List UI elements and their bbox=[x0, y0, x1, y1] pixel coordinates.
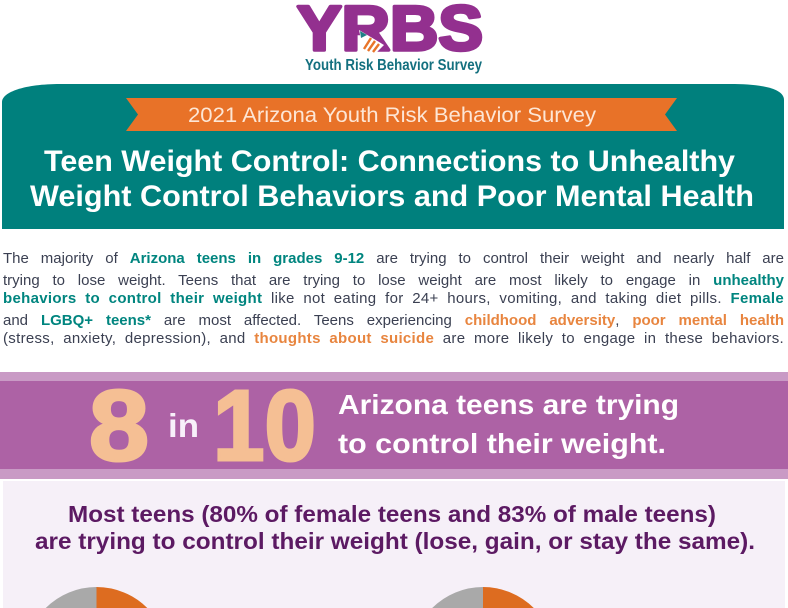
stat text: to control their weight. bbox=[338, 428, 666, 459]
title: Weight Control Behaviors and Poor Mental Health bbox=[30, 180, 754, 213]
intro text: behaviors to control their weight like not eating for 24+ hours, vomiting, and taking diet pills. Female bbox=[3, 290, 784, 307]
header banner bbox=[2, 84, 784, 229]
stat: 8 in 10: 8 bbox=[89, 370, 149, 482]
stat: 8 in 10 bbox=[89, 370, 316, 482]
panel heading: Most teens (80% of female teens and 83% of male teens) bbox=[68, 501, 716, 527]
stat: 8 in 10: in bbox=[168, 407, 199, 444]
stat text bbox=[338, 389, 679, 459]
stat: 8 in 10: 10 bbox=[213, 370, 316, 482]
intro text bbox=[3, 250, 784, 347]
intro text: The majority of Arizona teens in grades 9-12 are trying to control their weight and nearly half are bbox=[3, 250, 784, 267]
ribbon bbox=[126, 98, 677, 131]
pie chart: male teens bbox=[432, 587, 534, 608]
intro text: trying to lose weight. Teens that are trying to lose weight are most likely to engage in unhealthy bbox=[3, 272, 784, 289]
stat text: Arizona teens are trying bbox=[338, 389, 679, 420]
title bbox=[30, 145, 754, 213]
panel: weight control bbox=[3, 481, 785, 608]
panel heading: are trying to control their weight (lose, gain, or stay the same). bbox=[35, 528, 755, 554]
intro text: (stress, anxiety, depression), and thoughts about suicide are more likely to engage in these behaviors. bbox=[3, 330, 784, 347]
intro text: and LGBQ+ teens* are most affected. Teens experiencing childhood adversity, poor mental health bbox=[3, 312, 784, 329]
title: Teen Weight Control: Connections to Unhealthy bbox=[44, 145, 735, 178]
ribbon: 2021 Arizona Youth Risk Behavior Survey bbox=[188, 104, 597, 127]
pie chart: female teens bbox=[46, 587, 147, 608]
panel heading bbox=[35, 501, 755, 554]
logo: YRBS: Youth Risk Behavior Survey bbox=[305, 57, 482, 74]
stat band bbox=[0, 370, 788, 482]
